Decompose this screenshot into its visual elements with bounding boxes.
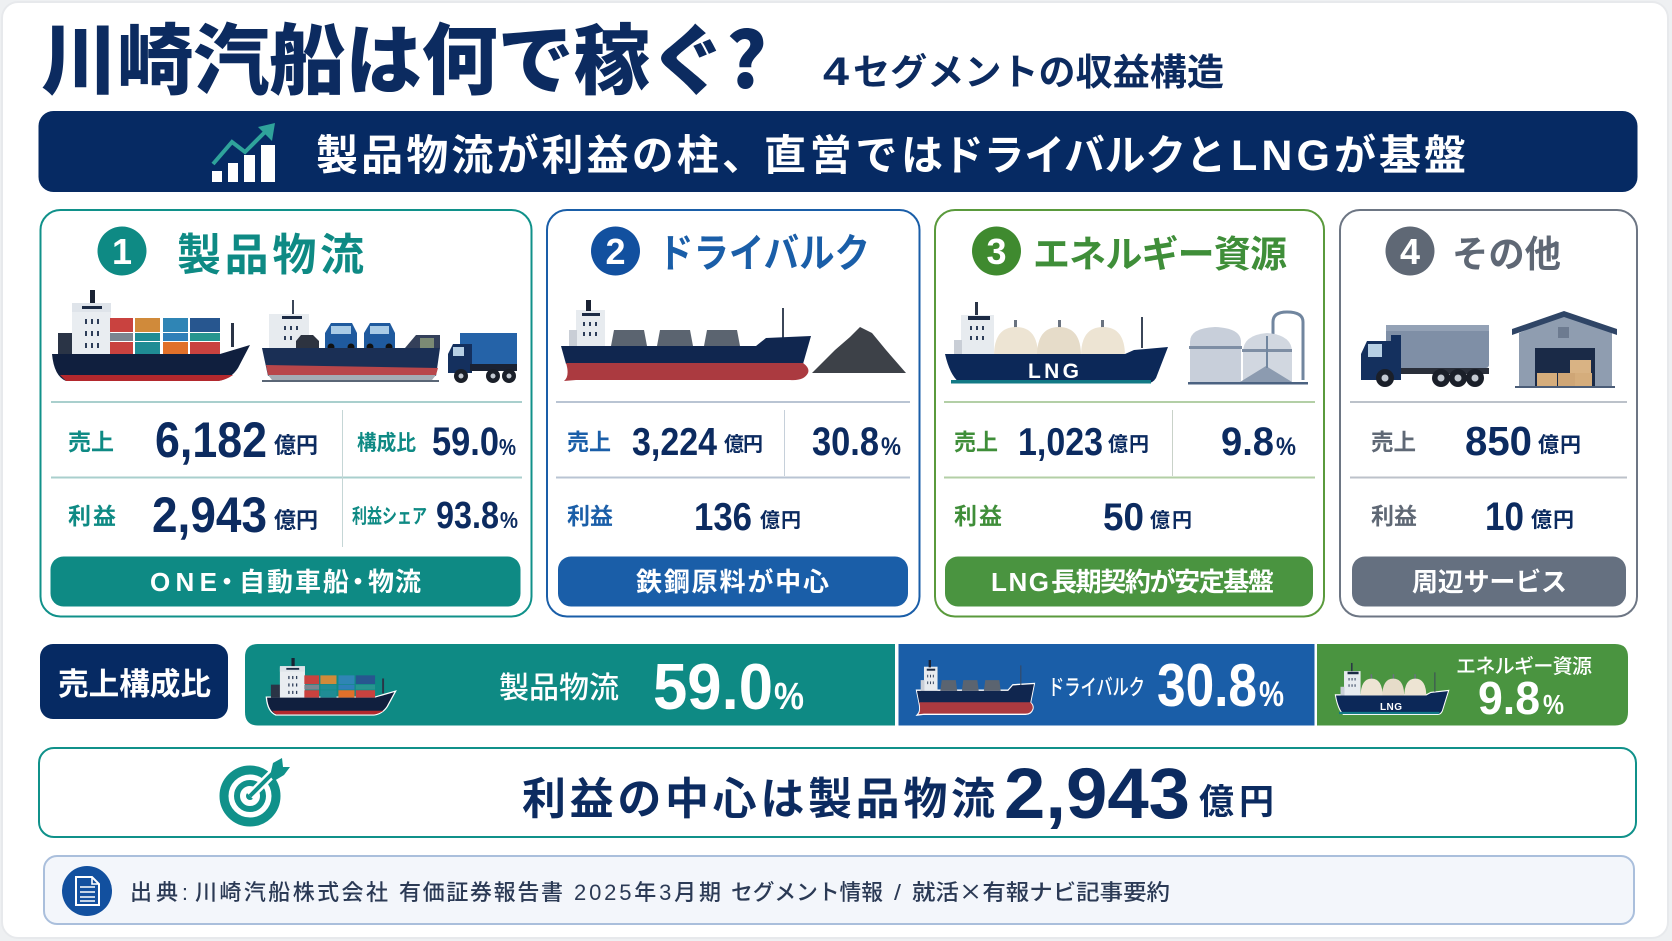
- segment 4 heading: その他: [1452, 234, 1561, 275]
- segment 3 number badge: [972, 226, 1021, 276]
- source text: /: [894, 880, 902, 905]
- title: 川崎汽船は何で稼ぐ?: [41, 0, 767, 111]
- bar segment: 製品物流 59.0%: 製品物流: [499, 672, 619, 705]
- metric: profit: [954, 496, 1192, 539]
- panel: segment 1 製品物流: [40, 210, 532, 616]
- segment 2 tag: [558, 556, 908, 606]
- banner headline: [316, 132, 1466, 180]
- source text: セグメント情報: [731, 880, 883, 905]
- icon: LNG storage tanks: [1188, 312, 1308, 384]
- metric: sales: 億円: [724, 433, 763, 456]
- icon: LNG carrier: LNG: [1028, 360, 1079, 383]
- metric: profit share: 利益シェア: [352, 505, 427, 528]
- bar segment: 製品物流 59.0%: 59.0: [653, 650, 773, 723]
- source text: 川崎汽船株式会社: [195, 880, 388, 905]
- sales composition label: [40, 644, 228, 719]
- callout unit: 億円: [1199, 783, 1274, 822]
- callout: profit centre: [39, 748, 1636, 837]
- banner headline: 製品物流が利益の柱、: [316, 132, 764, 179]
- segment 4 tag: 周辺サービス: [1412, 567, 1567, 597]
- segment 1 tag: 自動車船: [239, 567, 349, 597]
- metric: share of sales: 59.0: [432, 420, 499, 464]
- metric: profit: [68, 487, 318, 543]
- metric: sales: 850: [1465, 418, 1532, 464]
- bar segment: エネルギー資源 9.8%: エネルギー資源: [1456, 655, 1592, 678]
- metric: share of sales: 構成比: [357, 431, 416, 455]
- metric: profit share: [352, 495, 518, 537]
- metric: sales: [954, 421, 1149, 464]
- bar segment: ドライバルク 30.8%: [898, 644, 1314, 726]
- metric: profit: [1371, 495, 1574, 539]
- metric: profit: 136: [694, 496, 752, 539]
- segment 2 number badge: 2: [605, 231, 626, 272]
- source panel: [44, 856, 1634, 924]
- segment 3 tag: 長期契約が安定基盤: [1051, 567, 1274, 597]
- segment 1 tag: [50, 556, 520, 606]
- metric: sales: 億円: [1108, 433, 1149, 456]
- segment 2 number badge: [591, 226, 640, 276]
- panel: segment 3 エネルギー資源: [935, 210, 1324, 616]
- icon: LNG carrier: [945, 302, 1168, 384]
- segment 2 heading: ドライバルク: [658, 232, 870, 276]
- source text: [130, 875, 1170, 907]
- metric: share of sales: 9.8: [1221, 420, 1274, 464]
- icon: rising bar chart with arrow: [212, 123, 275, 182]
- metric: sales: 3,224: [632, 421, 717, 464]
- bar segment: 製品物流 59.0%: %: [774, 676, 804, 718]
- icon: document: [62, 866, 112, 916]
- segment 1 tag: ONE: [150, 567, 217, 597]
- panel: segment 2 ドライバルク: [547, 210, 920, 616]
- icon: target with arrow: [224, 758, 290, 822]
- segment 4 number badge: [1386, 226, 1434, 276]
- metric: sales: [1371, 418, 1581, 464]
- metric: sales: [68, 412, 318, 468]
- metric: sales: [567, 421, 763, 464]
- subtitle: 4: [823, 50, 850, 94]
- icon: blue cargo truck: [448, 333, 517, 383]
- sales composition label: 売上構成比: [58, 667, 211, 702]
- metric: sales: 売上: [954, 429, 998, 455]
- source text: 2025年3月期: [574, 880, 721, 905]
- metric: profit: 50: [1103, 496, 1144, 539]
- metric: sales: 億円: [274, 433, 318, 458]
- metric: profit: 億円: [1150, 509, 1192, 532]
- metric: share of sales: %: [1276, 433, 1296, 461]
- metric: sales: 億円: [1538, 434, 1581, 457]
- source text: 就活×有報ナビ記事要約: [912, 875, 1170, 907]
- segment 1 number badge: [98, 226, 146, 276]
- subtitle: セグメントの収益構造: [853, 52, 1224, 93]
- icon: car carrier: [262, 300, 440, 382]
- segment 4 number badge: 4: [1400, 231, 1420, 272]
- segment 1 number badge: 1: [112, 231, 132, 272]
- metric: share of sales: [357, 420, 516, 464]
- bar segment: ドライバルク 30.8%: 30.8: [1157, 652, 1257, 719]
- icon: bulk carrier: [561, 300, 811, 381]
- metric: profit: 10: [1485, 495, 1524, 539]
- metric: profit: 億円: [760, 509, 801, 532]
- bar segment: エネルギー資源 9.8%: 9.8: [1478, 672, 1540, 724]
- metric: sales: 1,023: [1018, 421, 1103, 464]
- callout text: 利益の中心は製品物流: [522, 775, 995, 824]
- key message banner: [38, 111, 1638, 192]
- bar segment: 製品物流 59.0%: [245, 644, 895, 726]
- callout value: 2,943: [1004, 755, 1190, 834]
- segment 1 heading: 製品物流: [177, 231, 364, 280]
- metric: sales: 売上: [1371, 429, 1416, 455]
- banner headline: が基盤: [1334, 132, 1466, 179]
- metric: profit share: %: [500, 507, 518, 533]
- metric: profit: 利益: [954, 503, 1002, 529]
- segment 1 tag: ・: [345, 567, 371, 597]
- metric: share of sales: %: [499, 434, 516, 460]
- banner headline: 直営では: [764, 132, 943, 179]
- metric: sales: 売上: [567, 429, 611, 455]
- segment 3 heading: エネルギー資源: [1033, 234, 1287, 275]
- metric: profit: 利益: [1371, 503, 1417, 529]
- icon: warehouse: [1512, 311, 1617, 388]
- bar segment: ドライバルク 30.8%: ドライバルク: [1048, 675, 1145, 700]
- segment 2 tag: 鉄鋼原料が中心: [636, 567, 829, 597]
- metric: profit share: 93.8: [436, 495, 499, 537]
- segment 3 tag: LNG: [991, 567, 1049, 597]
- icon: coal pile: [812, 327, 906, 373]
- bar segment: エネルギー資源 9.8%: %: [1543, 689, 1564, 720]
- icon: gray cargo truck: [1361, 325, 1489, 387]
- metric: profit: 2,943: [152, 487, 267, 543]
- segment 1 tag: ・: [214, 567, 240, 597]
- segment 4 tag: [1352, 556, 1626, 606]
- banner headline: ドライバルク: [943, 132, 1186, 179]
- stacked bar: sales composition: [245, 644, 1628, 726]
- metric: profit: 利益: [567, 503, 613, 529]
- segment 3 number badge: 3: [986, 231, 1007, 272]
- bar segment: エネルギー資源 9.8%: [1317, 644, 1628, 726]
- metric: share of sales: 30.8: [812, 420, 879, 464]
- metric: sales: 売上: [68, 429, 114, 455]
- metric: profit: 億円: [274, 508, 318, 533]
- banner headline: LNG: [1231, 132, 1330, 180]
- icon: container ship: [52, 290, 250, 381]
- metric: profit: 利益: [68, 503, 116, 529]
- bar segment: エネルギー資源 9.8%: LNG: [1380, 702, 1402, 713]
- metric: sales: 6,182: [155, 412, 267, 468]
- banner headline: と: [1186, 132, 1226, 179]
- metric: share of sales: %: [881, 433, 901, 461]
- source text: 有価証券報告書: [399, 880, 563, 905]
- segment 1 tag: 物流: [368, 567, 421, 597]
- source text: 出典:: [130, 880, 188, 905]
- metric: profit: 億円: [1531, 509, 1574, 532]
- bar segment: ドライバルク 30.8%: %: [1259, 675, 1284, 714]
- segment 3 tag: [945, 556, 1313, 606]
- metric: profit: [567, 496, 801, 539]
- panel: segment 4 その他: [1340, 210, 1637, 616]
